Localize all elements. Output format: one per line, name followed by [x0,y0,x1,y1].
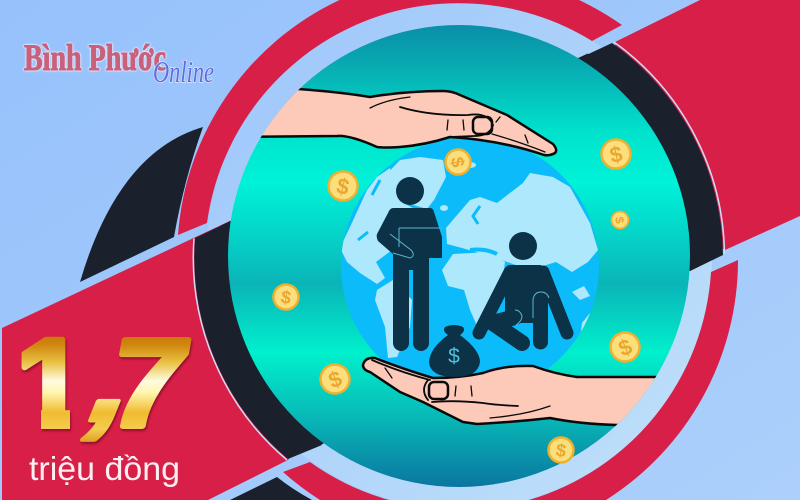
coin 6: $ [325,366,345,393]
coin 5 [272,283,300,311]
upper hand [230,88,556,155]
big number 1,7 [22,336,194,445]
logo: Online: Online [153,54,214,89]
coin 1 [326,169,360,203]
coin 1: $ [334,173,351,200]
seated person [479,232,567,343]
land masses [340,157,598,358]
inland seas [358,180,506,254]
dark crescent upper left [80,127,203,282]
coin 5: $ [279,287,293,308]
red outer ring, lower left arc [283,462,389,500]
logo: Bình Phước: Bình Phước [24,38,166,79]
caption: triệu đồng [29,450,180,487]
coin 8: $ [555,440,567,461]
standing person [377,177,442,351]
coin 4 [610,210,630,230]
money bag [429,325,480,377]
red band left [2,188,400,500]
coin 3: $ [608,141,625,168]
dark crescent bottom [230,477,312,500]
red band right [615,0,800,250]
coin 2: $ [447,155,468,169]
coin 7: $ [615,334,636,361]
money bag: $ [448,345,460,368]
dark ring, lower left piece [194,222,322,459]
comma: , [71,307,165,447]
dark ring, upper right piece [580,43,723,271]
thin light outline on dark ring [193,42,724,460]
lower hand [363,358,700,425]
coin 4: $ [612,216,627,225]
dark backing behind disc inside band [220,54,699,444]
coin 8 [547,436,575,464]
coins [272,137,644,464]
logo [24,38,214,89]
red outer ring, upper arc [178,0,622,235]
coin 3 [599,137,633,171]
coin 2 [444,148,472,176]
coin 6 [316,360,354,398]
coin 7 [606,328,644,366]
red outer ring, lower right arc [529,260,738,500]
teal disc [228,25,690,487]
digit 7: 7 [99,312,199,453]
globe [340,137,599,395]
light blue inner ring [206,3,712,500]
digit 1: 1 [16,314,86,453]
